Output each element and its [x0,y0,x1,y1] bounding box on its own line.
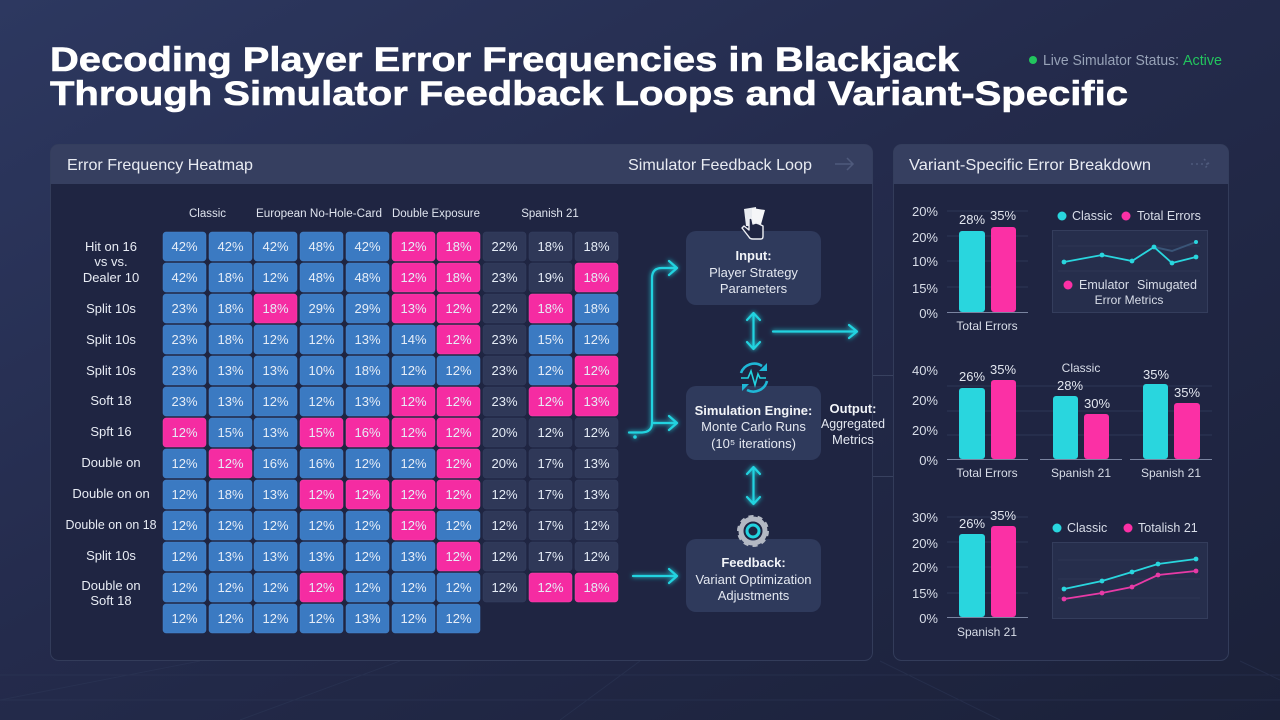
row 6: 12% [537,394,564,409]
heatmap row labels: Soft 18 [90,593,132,608]
line chart: simulator metrics: Error Metrics [1095,293,1163,307]
row 5: 23% [171,363,198,378]
row 8: 12% [400,456,427,471]
output label: Aggregated [821,416,885,431]
chart: variant comparison: 0% [919,453,938,468]
row 11: 12% [583,549,610,564]
output label [821,401,885,447]
row 3: 18% [217,301,244,316]
status indicator: Live Simulator Status: [1043,52,1179,69]
heatmap row labels: Split 10s [86,301,136,316]
chart: total errors top: 15% [912,281,938,296]
row 9: 13% [262,487,289,502]
row 6: 12% [400,394,427,409]
flow box: feedback [686,539,821,612]
row 6: 13% [583,394,610,409]
row 10: 12% [308,518,335,533]
row 7: 20% [491,425,518,440]
row 7 [163,418,618,447]
heatmap row labels: Double on [81,578,141,593]
row 11: 12% [491,549,518,564]
row 6: 23% [171,394,198,409]
row 3: 23% [171,301,198,316]
panel: heatmap and feedback loop: Simulator Feedback Loop [628,157,812,174]
row 8: 16% [308,456,335,471]
row 10: 12% [583,518,610,533]
chart: variant comparison: 35% [1143,367,1169,382]
row 12: 12% [171,580,198,595]
row 1: 48% [308,239,335,254]
row 9: 13% [583,487,610,502]
legend: classic and total errors: Classic [1072,209,1112,223]
heatmap row labels: Spft 16 [90,424,132,439]
row 9: 18% [217,487,244,502]
heatmap row labels: vs vs. [94,254,128,269]
heatmap row labels: Double on [81,455,141,470]
row 6: 12% [308,394,335,409]
row 9: 12% [308,487,335,502]
chart: variant comparison: 35% [990,362,1016,377]
legend: classic and total errors: Total Errors [1137,209,1201,223]
row 9: 12% [354,487,381,502]
row 13: 12% [308,611,335,626]
row 5: 12% [583,363,610,378]
row 10: 12% [400,518,427,533]
row 2: 18% [445,270,472,285]
row 3 [163,294,618,323]
row 12: 12% [445,580,472,595]
chart: total errors top: Total Errors [956,319,1018,333]
row 10: 12% [445,518,472,533]
chart: variant comparison: 30% [1084,396,1110,411]
chart: variant comparison: 26% [959,369,985,384]
icon: hand holding cards [742,207,765,239]
row 11: 13% [308,549,335,564]
row 4: 12% [445,332,472,347]
row 2: 12% [262,270,289,285]
row 8: 20% [491,456,518,471]
row 3: 22% [491,301,518,316]
row 7: 15% [217,425,244,440]
row 12: 12% [354,580,381,595]
row 9: 12% [491,487,518,502]
row 5: 10% [308,363,335,378]
row 1: 18% [445,239,472,254]
flow box: feedback: Adjustments [718,588,790,603]
row 13: 12% [400,611,427,626]
row 6: 12% [262,394,289,409]
flow box: simulation engine: Simulation Engine: [695,403,812,418]
row 2: 18% [217,270,244,285]
chart: spanish 21: Spanish 21 [957,625,1017,639]
row 5: 18% [354,363,381,378]
row 3: 13% [400,301,427,316]
chart: variant comparison: Spanish 21 [1051,466,1111,480]
heatmap row labels: Hit on 16 [85,239,137,254]
arrow: output [773,325,857,338]
chart: variant comparison: 35% [1174,385,1200,400]
row 1: 12% [400,239,427,254]
row 3: 12% [445,301,472,316]
row 10 [163,511,618,540]
heatmap row labels: Split 10s [86,363,136,378]
chart: spanish 21: 0% [919,611,938,626]
row 2: 19% [537,270,564,285]
row 12 [163,573,618,602]
row 13 [163,604,480,633]
chart: total errors top: 10% [912,254,938,269]
row 6 [163,387,618,416]
row 9: 12% [445,487,472,502]
row 9: 12% [171,487,198,502]
row 1: 18% [537,239,564,254]
row 7: 12% [400,425,427,440]
row 7: 13% [262,425,289,440]
panel: heatmap and feedback loop [50,144,872,660]
heatmap row labels: Double on on [72,486,150,501]
row 12: 12% [400,580,427,595]
chart: total errors top: 0% [919,306,938,321]
title [50,41,1128,113]
chart: variant comparison: Classic [1062,361,1100,375]
row 5: 12% [445,363,472,378]
heatmap row labels [66,239,156,608]
chart: spanish 21: 15% [912,586,938,601]
chart: variant comparison: 20% [912,393,938,408]
heatmap column headers: Classic [189,208,226,220]
row 11 [163,542,618,571]
row 2: 12% [400,270,427,285]
row 2: 48% [354,270,381,285]
row 12: 18% [583,580,610,595]
row 12: 12% [537,580,564,595]
row 4 [163,325,618,354]
row 2: 18% [583,270,610,285]
panel connectors [873,376,893,476]
row 3: 18% [583,301,610,316]
row 13: 12% [262,611,289,626]
row 11: 13% [262,549,289,564]
row 7: 16% [354,425,381,440]
row 1: 42% [262,239,289,254]
row 7: 12% [171,425,198,440]
chart: total errors top: 28% [959,212,985,227]
row 2 [163,263,618,292]
row 11: 12% [171,549,198,564]
row 5: 12% [400,363,427,378]
row 7: 12% [537,425,564,440]
flow box: simulation engine [686,386,821,460]
row 4: 15% [537,332,564,347]
row 5 [163,356,618,385]
heatmap row labels: Split 10s [86,548,136,563]
row 11: 13% [217,549,244,564]
row 7: 12% [445,425,472,440]
chart: total errors top: 20% [912,230,938,245]
output label: Output: [830,401,876,416]
chart: spanish 21: 20% [912,560,938,575]
row 2: 42% [171,270,198,285]
row 4: 12% [262,332,289,347]
heatmap column headers: Double Exposure [392,208,480,220]
row 8 [163,449,618,478]
legend: classic and total errors [1058,209,1201,223]
row 6: 13% [217,394,244,409]
row 12: 12% [262,580,289,595]
heatmap row labels: Soft 18 [90,393,132,408]
row 8: 12% [217,456,244,471]
arrow: into feedback [633,569,677,583]
row 6: 12% [445,394,472,409]
row 10: 12% [354,518,381,533]
row 8: 12% [445,456,472,471]
row 3: 29% [354,301,381,316]
legend: classic and totalish 21: Classic [1067,521,1107,535]
row 8: 12% [354,456,381,471]
chart: variant comparison: 40% [912,363,938,378]
row 8: 13% [583,456,610,471]
heatmap grid [163,232,618,633]
row 10: 12% [262,518,289,533]
row 12: 12% [217,580,244,595]
row 8: 17% [537,456,564,471]
row 4: 12% [308,332,335,347]
arrow: feedback return path [629,261,677,439]
flow box: simulation engine: (10⁵ iterations) [711,436,796,451]
output label: Metrics [832,432,874,447]
chart: spanish 21 [912,508,1028,639]
row 1: 22% [491,239,518,254]
icon: gear [738,516,768,546]
row 11: 12% [354,549,381,564]
row 11: 13% [400,549,427,564]
row 1: 42% [171,239,198,254]
row 5: 23% [491,363,518,378]
chart: spanish 21: 26% [959,516,985,531]
chart: spanish 21: 30% [912,510,938,525]
line chart: simulator metrics [1052,230,1208,312]
row 3: 18% [537,301,564,316]
heatmap row labels: Split 10s [86,332,136,347]
flow box: feedback: Feedback: [721,555,786,570]
line chart: simulator metrics: Emulator [1079,278,1129,292]
legend: classic and totalish 21: Totalish 21 [1138,521,1198,535]
legend: classic and totalish 21 [1052,521,1198,535]
heatmap row labels: Double on on 18 [66,517,156,532]
flow box: input: Player Strategy [709,265,798,280]
chart: spanish 21: 20% [912,536,938,551]
chart: spanish 21: 35% [990,508,1016,523]
row 5: 13% [217,363,244,378]
flow box: input: Input: [735,248,772,263]
row 12: 12% [308,580,335,595]
row 12: 12% [491,580,518,595]
row 4: 23% [491,332,518,347]
flow box: simulation engine: Monte Carlo Runs [701,419,806,434]
panel: variant breakdown: Variant-Specific Error Breakdown [909,157,1151,174]
chart: variant comparison [912,361,1212,480]
row 4: 13% [354,332,381,347]
heatmap column headers: Spanish 21 [521,208,579,220]
row 6: 13% [354,394,381,409]
line chart: simulator metrics: Simugated [1137,278,1197,292]
flow box: feedback: Variant Optimization [695,572,812,587]
chart: total errors top [912,204,1028,333]
row 4: 18% [217,332,244,347]
row 10: 17% [537,518,564,533]
heatmap column headers: European No-Hole-Card [256,208,382,220]
row 9 [163,480,618,509]
row 2: 23% [491,270,518,285]
row 1: 18% [583,239,610,254]
chart: total errors top: 20% [912,204,938,219]
row 1: 42% [354,239,381,254]
chart: variant comparison: Spanish 21 [1141,466,1201,480]
row 1: 42% [217,239,244,254]
row 3: 18% [262,301,289,316]
chart: variant comparison: 20% [912,423,938,438]
title: Through Simulator Feedback Loops and Variant-Specific [50,75,1128,113]
row 13: 12% [445,611,472,626]
row 3: 29% [308,301,335,316]
arrow: engine to feedback [747,467,760,504]
chart: variant comparison: Total Errors [956,466,1018,480]
row 5: 12% [537,363,564,378]
heatmap column headers [189,208,579,220]
panel: heatmap and feedback loop: Error Frequency Heatmap [67,157,253,174]
row 10: 12% [217,518,244,533]
arrow: input to engine [747,313,760,349]
row 4: 23% [171,332,198,347]
panel: variant breakdown [894,144,1228,660]
row 1 [163,232,618,261]
title: Decoding Player Error Frequencies in Blackjack [50,41,959,79]
row 13: 12% [171,611,198,626]
row 9: 12% [400,487,427,502]
row 10: 12% [171,518,198,533]
row 11: 12% [445,549,472,564]
row 7: 12% [583,425,610,440]
row 11: 17% [537,549,564,564]
row 4: 12% [583,332,610,347]
row 8: 12% [171,456,198,471]
heatmap row labels: Dealer 10 [83,270,139,285]
line chart: spanish 21 trend [1052,542,1208,618]
row 4: 14% [400,332,427,347]
chart: variant comparison: 28% [1057,378,1083,393]
status indicator: Active [1183,52,1222,69]
row 13: 12% [217,611,244,626]
row 8: 16% [262,456,289,471]
row 5: 13% [262,363,289,378]
flow box: input [686,231,821,305]
row 9: 17% [537,487,564,502]
chart: total errors top: 35% [990,208,1016,223]
icon: simulation cycle [741,363,767,392]
row 6: 23% [491,394,518,409]
row 2: 48% [308,270,335,285]
flow box: input: Parameters [720,281,788,296]
row 7: 15% [308,425,335,440]
row 13: 13% [354,611,381,626]
row 10: 12% [491,518,518,533]
